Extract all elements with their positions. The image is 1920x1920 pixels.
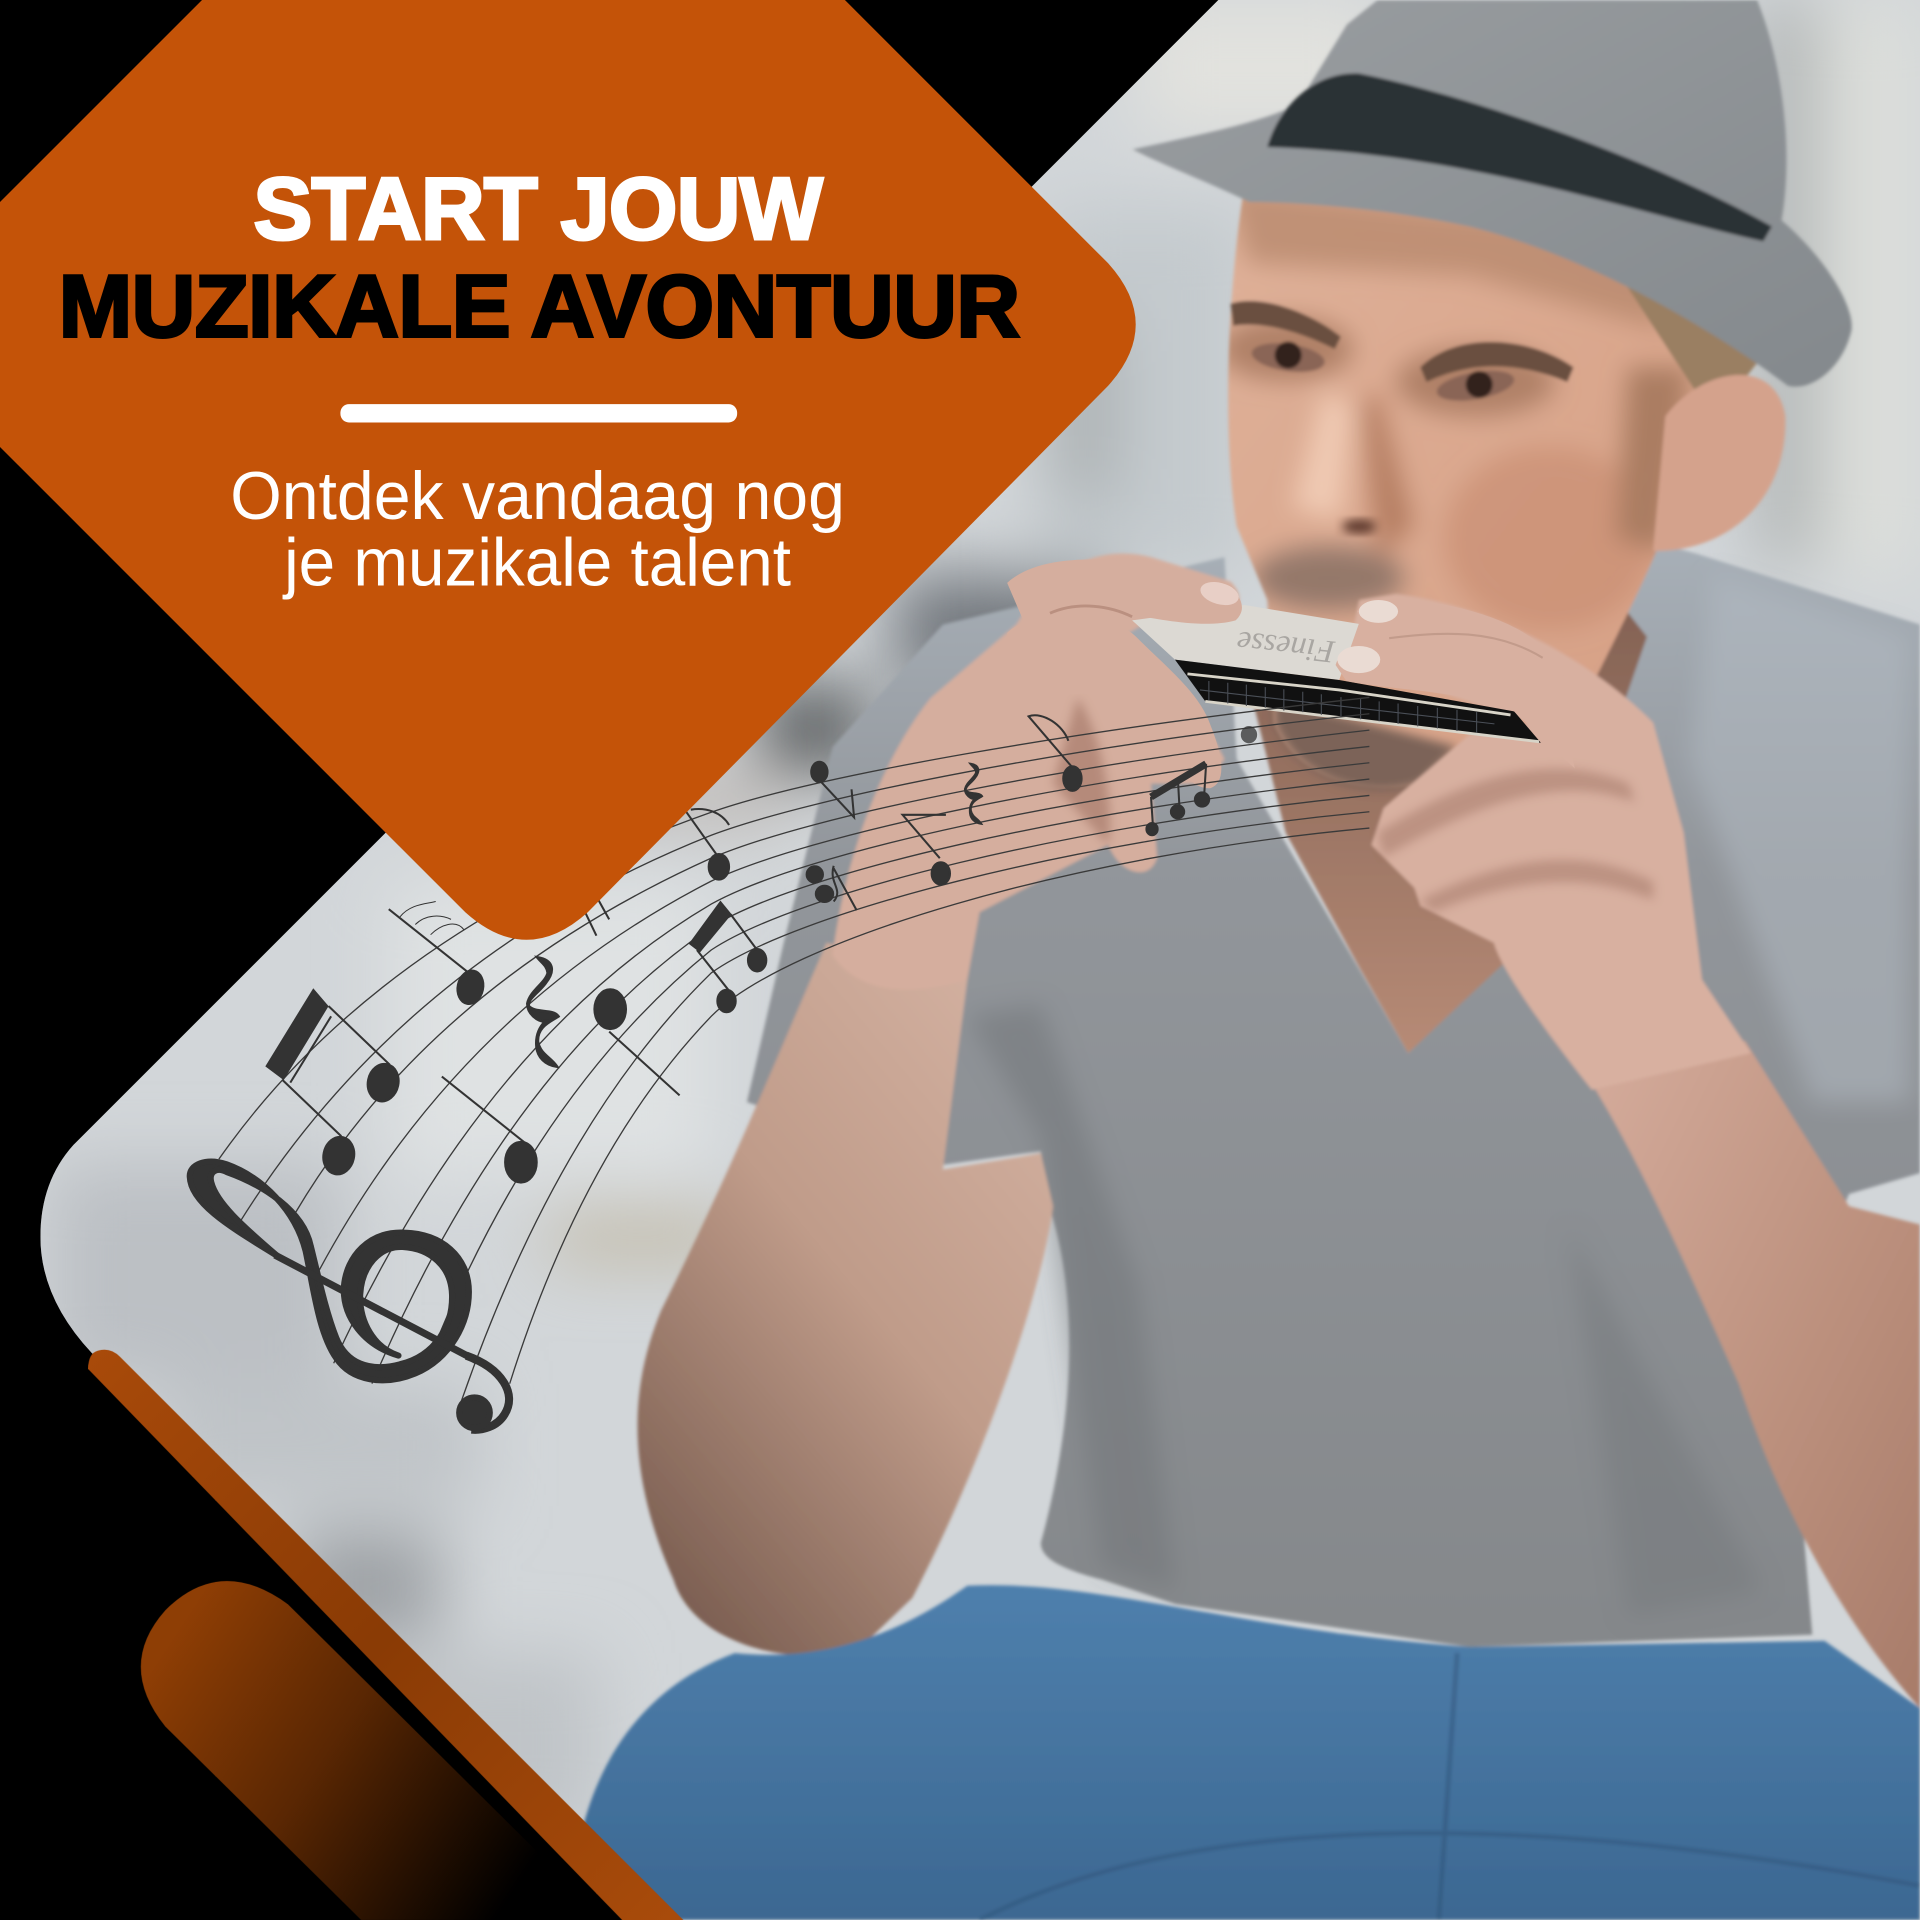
right fingernails — [1337, 600, 1398, 673]
facial shading — [1218, 184, 1690, 631]
right finger crease — [1389, 634, 1543, 658]
divider — [340, 404, 737, 422]
right hand shading — [1378, 769, 1653, 912]
eyebrows — [1231, 301, 1573, 382]
left index finger — [1007, 614, 1221, 788]
subtitle line 2: je muzikale talent — [282, 525, 791, 600]
faint note near chin — [1242, 727, 1256, 742]
face — [1228, 184, 1696, 788]
neck and chest — [1252, 612, 1648, 1054]
small beamed notes — [689, 901, 766, 1012]
triple beamed notes — [1146, 764, 1209, 835]
ear — [1653, 375, 1785, 551]
double note — [807, 866, 857, 910]
subtitle — [230, 459, 845, 600]
notes — [265, 715, 1256, 1183]
harmonica comb and holes — [1175, 660, 1541, 743]
hat band — [1267, 73, 1772, 241]
eyes — [1250, 339, 1516, 406]
title line 2: MUZIKALE AVONTUUR — [59, 257, 1020, 356]
musical staff flowing from harmonica — [190, 697, 1369, 1430]
jeans — [569, 1585, 1920, 1920]
hair — [1616, 257, 1763, 551]
harmonica top plate — [1132, 605, 1359, 680]
left hand shading — [1053, 698, 1110, 845]
staff lines — [219, 697, 1369, 1402]
single note with flag — [389, 902, 486, 1006]
right upper finger — [1357, 600, 1564, 676]
title line 1: START JOUW — [253, 159, 824, 258]
note with long stem — [442, 1077, 537, 1183]
left fingernail — [1198, 578, 1241, 609]
beamed notes large — [265, 988, 402, 1177]
stubble under harmonica — [1273, 698, 1457, 790]
diamond shape — [0, 0, 1136, 940]
right forearm — [1592, 1041, 1920, 1708]
note upper — [685, 809, 729, 880]
left finger crease — [1050, 606, 1132, 617]
rest over fingers — [965, 764, 982, 824]
quarter rest — [528, 958, 558, 1066]
nostril — [1342, 519, 1376, 534]
note near fingers — [1029, 715, 1082, 791]
left forearm — [637, 943, 1053, 1656]
right hand — [1347, 594, 1751, 1090]
hat — [1133, 0, 1852, 387]
left finger over harmonica — [1007, 559, 1242, 633]
left hand — [833, 554, 1239, 990]
note over wrist — [811, 762, 854, 817]
right lower finger — [1336, 636, 1575, 768]
gradient capsule accent — [141, 1581, 606, 1920]
panel: orange diamond headline — [0, 0, 1136, 940]
hat body — [1133, 0, 1852, 387]
person — [569, 0, 1920, 1920]
treble clef — [190, 1162, 509, 1430]
subtitle line 1: Ontdek vandaag nog — [230, 459, 845, 534]
harmonica — [1007, 559, 1575, 788]
bottom accent elements — [88, 1350, 686, 1920]
harmonica brand: Finesse — [1235, 625, 1337, 671]
note over hand — [903, 815, 950, 885]
shirt shading — [967, 576, 1910, 1616]
note with stem down — [594, 989, 680, 1095]
t-shirt — [747, 539, 1920, 1647]
partial note under panel — [584, 896, 609, 936]
diagonal strip accent — [88, 1350, 686, 1920]
jeans seams — [980, 1653, 1920, 1920]
